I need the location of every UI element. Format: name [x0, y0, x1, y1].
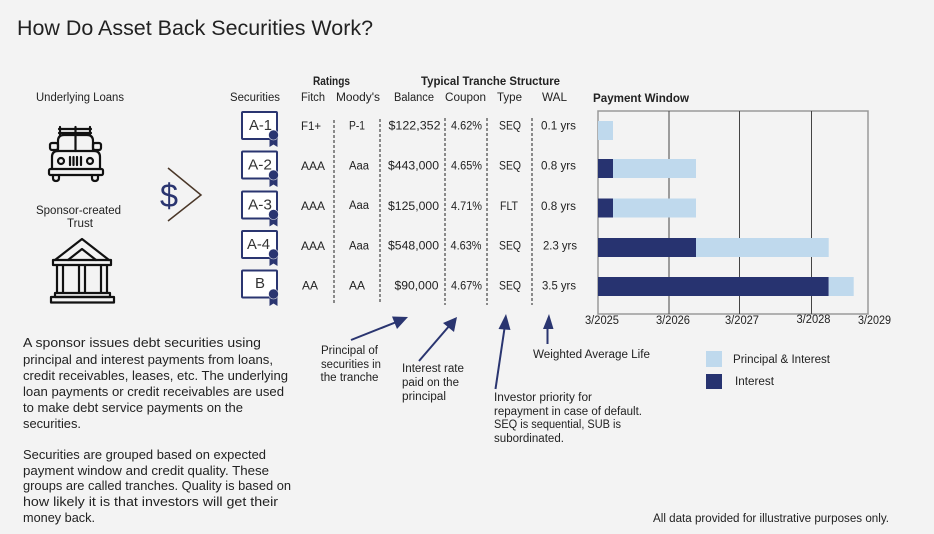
- icon: security badge A-3: [242, 192, 278, 226]
- text block: explanation 2: Securities are grouped based on expected: [23, 447, 266, 462]
- row A-4: 2.3 yrs: [543, 240, 577, 252]
- heading: underlying loans: Underlying Loans: [36, 92, 124, 104]
- arrow: type: [496, 314, 510, 389]
- icon: security badge A-2: A-2: [248, 156, 272, 174]
- bar A-3: [598, 198, 696, 218]
- legend: [706, 351, 831, 389]
- row A-4: $548,000: [388, 240, 439, 252]
- heading: typical tranche structure: Typical Tranche Structure: [421, 76, 560, 88]
- bar A-1: [598, 121, 613, 140]
- text block: explanation 2: [23, 447, 291, 525]
- bar A-2: [598, 159, 696, 178]
- callout: coupon: principal: [402, 391, 446, 403]
- row A-1: 0.1 yrs: [541, 120, 576, 132]
- row A-3: AAA: [301, 201, 325, 213]
- column headers: [301, 92, 568, 104]
- row A-4: SEQ: [499, 240, 521, 252]
- row A-4: AAA: [301, 241, 325, 253]
- row A-1: [301, 120, 576, 133]
- row B: 3.5 yrs: [542, 280, 576, 292]
- callout: type: SEQ is sequential, SUB is: [494, 419, 621, 431]
- row B: AA: [349, 280, 365, 292]
- text block: explanation 2: how likely it is that investors will get their: [23, 494, 279, 509]
- text block: explanation 1: securities.: [23, 416, 81, 431]
- row A-2: $443,000: [388, 160, 439, 172]
- row A-2: Aaa: [349, 160, 370, 172]
- text block: explanation 1: credit receivables, leases, etc. The underlying: [23, 368, 288, 383]
- title: How Do Asset Back Securities Work?: [17, 16, 373, 40]
- row A-2: 0.8 yrs: [541, 160, 576, 172]
- heading: payment window: Payment Window: [593, 93, 689, 105]
- icon: security badge B: B: [255, 275, 265, 292]
- text block: explanation 2: money back.: [23, 510, 95, 525]
- row A-4: Aaa: [349, 240, 370, 252]
- icon: security badge A-4: [242, 231, 278, 266]
- callout: balance: [320, 345, 381, 384]
- row A-1: P-1: [349, 120, 365, 132]
- row A-1: F1+: [301, 121, 321, 133]
- axis labels: 3/2027: [725, 315, 759, 327]
- axis labels: 3/2026: [656, 315, 690, 327]
- row A-4: [301, 240, 577, 253]
- text block: explanation 1: to make debt service payments on the: [23, 400, 243, 415]
- bar A-4: [598, 238, 829, 257]
- icon: security badge A-2: [242, 152, 278, 187]
- column headers: Balance: [394, 92, 434, 104]
- row B: AA: [302, 280, 318, 292]
- row A-3: 4.71%: [451, 201, 482, 213]
- callout: coupon: Interest rate: [402, 363, 464, 375]
- row A-3: FLT: [500, 201, 518, 213]
- row A-2: AAA: [301, 161, 325, 173]
- callout: balance: the tranche: [320, 372, 378, 384]
- text block: explanation 2: groups are called tranches. Quality is based on: [23, 478, 291, 493]
- footnote: All data provided for illustrative purposes only.: [653, 513, 889, 525]
- column headers: Type: [497, 92, 522, 104]
- row A-3: [301, 200, 576, 213]
- row B: SEQ: [499, 280, 521, 292]
- text block: explanation 2: payment window and credit quality. These: [23, 463, 269, 478]
- icon: security badge A-1: A-1: [249, 117, 272, 134]
- row A-1: $122,352: [388, 120, 440, 132]
- callout: coupon: paid on the: [402, 377, 459, 389]
- column headers: Fitch: [301, 92, 325, 104]
- text block: explanation 1: A sponsor issues debt securities using: [23, 335, 261, 350]
- text block: explanation 1: [23, 335, 288, 431]
- arrow: WAL: [543, 314, 554, 344]
- column headers: Moody's: [336, 92, 380, 104]
- axis labels: [585, 314, 891, 327]
- callout: balance: securities in: [321, 359, 381, 371]
- row B: [302, 280, 576, 292]
- row B: $90,000: [394, 280, 438, 292]
- icon: security badge B: [242, 270, 278, 306]
- callout: coupon: [402, 363, 464, 403]
- arrow: coupon: [419, 317, 457, 361]
- row A-1: 4.62%: [451, 120, 482, 132]
- row A-3: Aaa: [349, 200, 370, 212]
- callout: type: [494, 392, 642, 445]
- icon: security badge A-1: [242, 112, 278, 147]
- chart: payment window: [585, 93, 891, 327]
- heading: sponsor-created trust: Sponsor-created: [36, 205, 121, 217]
- bar B: [598, 277, 854, 296]
- icon: security badge A-3: A-3: [248, 196, 272, 214]
- axis labels: 3/2029: [858, 315, 891, 327]
- text block: explanation 1: principal and interest payments from loans,: [23, 352, 273, 367]
- row B: 4.67%: [451, 280, 482, 292]
- heading: sponsor-created trust: Trust: [67, 218, 94, 230]
- icon: car: [49, 127, 103, 181]
- arrow: dollar chevron: $: [160, 177, 178, 214]
- legend: Interest: [735, 376, 775, 388]
- row A-1: SEQ: [499, 120, 521, 132]
- table: ratings and tranche structure: [301, 76, 577, 305]
- callout: balance: Principal of: [321, 345, 379, 357]
- icon: bank building: [51, 239, 114, 302]
- arrow: balance: [351, 316, 408, 340]
- callout: WAL: Weighted Average Life: [533, 349, 650, 361]
- column headers: Coupon: [445, 92, 486, 104]
- callout: type: subordinated.: [494, 433, 564, 445]
- arrow: dollar chevron: [160, 168, 201, 221]
- column headers: WAL: [542, 92, 568, 104]
- axis labels: 3/2028: [796, 314, 830, 326]
- callout: type: repayment in case of default.: [494, 406, 642, 418]
- legend: Principal & Interest: [733, 354, 831, 366]
- heading: ratings: Ratings: [313, 76, 350, 88]
- heading: sponsor-created trust: [36, 205, 121, 230]
- axis labels: 3/2025: [585, 315, 619, 327]
- heading: securities: Securities: [230, 92, 280, 104]
- text block: explanation 1: loan payments or credit receivables are used: [23, 384, 284, 399]
- row A-3: 0.8 yrs: [541, 201, 576, 213]
- icon: security badge A-4: A-4: [247, 236, 270, 253]
- row A-2: [301, 160, 576, 173]
- row A-2: SEQ: [499, 160, 521, 172]
- callout: type: Investor priority for: [494, 392, 592, 404]
- row A-2: 4.65%: [451, 160, 482, 172]
- row A-4: 4.63%: [450, 240, 482, 252]
- row A-3: $125,000: [388, 201, 439, 213]
